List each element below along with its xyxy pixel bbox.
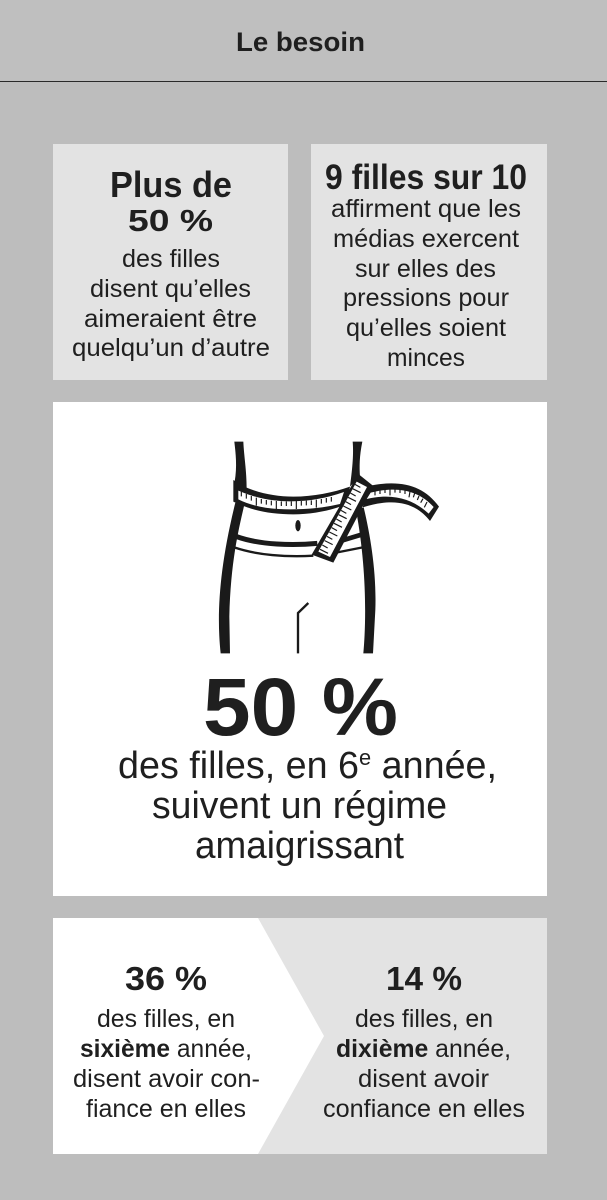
text block: médias: pressions pour [343, 284, 509, 312]
stat: 36 % [73, 960, 260, 1123]
text block: filles: des filles [122, 245, 220, 273]
heading: plus de 50 %: 50 % [128, 203, 213, 238]
heading: 9 filles sur 10: 9 filles sur 10 [325, 158, 527, 197]
panel: plus de 50 % [53, 144, 288, 380]
text block: médias [331, 195, 521, 372]
panel: confiance comparison [53, 918, 547, 1154]
stat: 14 %: disent avoir [358, 1065, 489, 1093]
stat: 36 %: sixième année, [80, 1035, 252, 1063]
text block: médias: qu’elles soient [346, 314, 506, 342]
stat: 14 %: confiance en elles [323, 1095, 525, 1123]
text block: régime: suivent un régime [152, 785, 447, 827]
tape: right loop [363, 483, 439, 521]
text block: régime [118, 745, 497, 867]
text block: régime: année, [371, 745, 497, 787]
text block: filles: aimeraient être [84, 305, 257, 333]
title: Le besoin [236, 27, 365, 57]
stat: 36 %: fiance en elles [86, 1095, 246, 1123]
stat: 14 %: dixième année, [336, 1035, 511, 1063]
header [0, 0, 607, 82]
text block: médias: sur elles des [355, 255, 496, 283]
arrow: white chevron [53, 918, 324, 1154]
text block: filles: quelqu’un d’autre [72, 334, 270, 362]
text block: médias: affirment que les [331, 195, 521, 223]
text block: médias: médias exercent [333, 225, 519, 253]
stat: 36 %: 36 % [125, 960, 207, 997]
stat: 14 %: des filles, en [355, 1005, 493, 1033]
icon: waist with measuring tape [219, 442, 439, 653]
panel: 50 % régime [53, 402, 547, 896]
big number: 50 % [203, 662, 398, 753]
text block: filles: disent qu’elles [90, 275, 251, 303]
tape: crossing strap [312, 474, 373, 563]
stat: 14 % [323, 960, 525, 1123]
text block: régime: e [359, 745, 371, 770]
panel: 9 filles sur 10 [311, 144, 547, 380]
stat: 36 %: des filles, en [97, 1005, 235, 1033]
tape: waist band [233, 480, 350, 514]
text block: médias: minces [387, 344, 465, 372]
text block: filles [72, 245, 270, 362]
heading: plus de 50 % [110, 164, 232, 238]
text block: régime: des filles, en 6 [118, 745, 361, 787]
stat: 14 %: 14 % [386, 960, 462, 997]
stat: 36 %: disent avoir con- [73, 1065, 260, 1093]
heading: plus de 50 %: Plus de [110, 164, 232, 205]
text block: régime: amaigrissant [195, 825, 404, 867]
